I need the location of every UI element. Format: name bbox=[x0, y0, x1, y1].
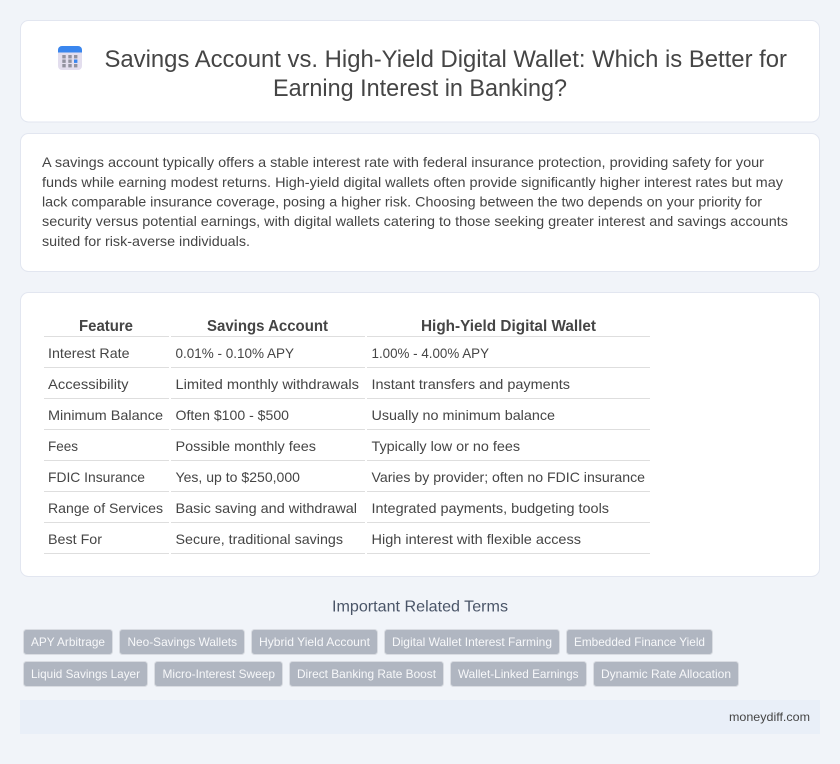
tags: related terms bbox=[24, 630, 738, 686]
tag: APY Arbitrage bbox=[31, 635, 105, 649]
tag bbox=[120, 630, 244, 654]
row: interest rate: 1.00% - 4.00% APY bbox=[372, 345, 490, 361]
title: Earning Interest in Banking? bbox=[273, 75, 567, 102]
row: minimum balance: Usually no minimum balance bbox=[372, 407, 555, 423]
text block: summary: funds while earning modest returns. High-yield digital wallets often provide significantly higher interest rates but may bbox=[42, 174, 783, 190]
row: accessibility bbox=[48, 376, 570, 392]
row: range of services: Range of Services bbox=[48, 500, 163, 516]
row: FDIC insurance: FDIC Insurance bbox=[48, 469, 145, 485]
table header bbox=[79, 318, 597, 335]
text block: summary bbox=[42, 154, 788, 249]
row: interest rate bbox=[48, 345, 490, 361]
row: FDIC insurance: Yes, up to $250,000 bbox=[176, 469, 300, 485]
footer bbox=[20, 700, 820, 734]
row: range of services bbox=[48, 500, 609, 516]
icon: calendar bbox=[58, 46, 82, 70]
tag: Wallet-Linked Earnings bbox=[458, 667, 578, 681]
row: minimum balance bbox=[48, 407, 555, 423]
tag bbox=[24, 630, 112, 654]
tag bbox=[384, 630, 560, 654]
row: accessibility: Limited monthly withdrawals bbox=[176, 376, 359, 392]
tag: Dynamic Rate Allocation bbox=[601, 667, 731, 681]
tag bbox=[290, 662, 444, 686]
title bbox=[104, 46, 787, 102]
row: FDIC insurance: Varies by provider; often no FDIC insurance bbox=[372, 469, 645, 485]
footer source: moneydiff.com bbox=[729, 710, 810, 724]
tag bbox=[154, 662, 282, 686]
row: best for: High interest with flexible access bbox=[372, 531, 581, 547]
row: fees: Fees bbox=[48, 438, 78, 454]
panel: comparison table bbox=[20, 292, 820, 576]
table header: Feature bbox=[79, 318, 133, 335]
row: fees: Typically low or no fees bbox=[372, 438, 520, 454]
row: best for: Best For bbox=[48, 531, 102, 547]
row: fees: Possible monthly fees bbox=[176, 438, 316, 454]
table header: Savings Account bbox=[207, 318, 329, 335]
row: minimum balance: Often $100 - $500 bbox=[176, 407, 289, 423]
tag bbox=[450, 662, 586, 686]
tag: Hybrid Yield Account bbox=[259, 635, 371, 649]
tag: Neo-Savings Wallets bbox=[128, 635, 237, 649]
table header: High-Yield Digital Wallet bbox=[421, 318, 597, 335]
row: FDIC insurance bbox=[48, 469, 645, 485]
table rules bbox=[44, 336, 650, 554]
tag: Digital Wallet Interest Farming bbox=[392, 635, 552, 649]
row: fees bbox=[48, 438, 520, 454]
row: best for bbox=[48, 531, 581, 547]
text block: summary: security versus potential earnings, with digital wallets catering to those seeking greater interest and savings accounts bbox=[42, 213, 788, 229]
row: range of services: Basic saving and withdrawal bbox=[176, 500, 357, 516]
tag: Embedded Finance Yield bbox=[574, 635, 705, 649]
row: best for: Secure, traditional savings bbox=[176, 531, 343, 547]
tag: Micro-Interest Sweep bbox=[162, 667, 275, 681]
row: accessibility: Accessibility bbox=[48, 376, 128, 392]
tag bbox=[566, 630, 712, 654]
heading: related terms: Important Related Terms bbox=[332, 598, 508, 616]
text block: summary: lack comparable insurance coverage, posing a higher risk. Choosing between the two depends on your priority for bbox=[42, 194, 762, 210]
row: interest rate: 0.01% - 0.10% APY bbox=[176, 345, 295, 361]
row: interest rate: Interest Rate bbox=[48, 345, 130, 361]
tag bbox=[24, 662, 148, 686]
text block: summary: suited for risk-averse individuals. bbox=[42, 233, 250, 249]
tag: Direct Banking Rate Boost bbox=[297, 667, 437, 681]
panel: summary paragraph bbox=[20, 134, 820, 272]
row: accessibility: Instant transfers and payments bbox=[372, 376, 570, 392]
tag bbox=[594, 662, 738, 686]
row: range of services: Integrated payments, budgeting tools bbox=[372, 500, 609, 516]
tag: Liquid Savings Layer bbox=[31, 667, 140, 681]
tag bbox=[252, 630, 378, 654]
title: Savings Account vs. High-Yield Digital Wallet: Which is Better for bbox=[104, 46, 787, 73]
row: minimum balance: Minimum Balance bbox=[48, 407, 163, 423]
text block: summary: A savings account typically offers a stable interest rate with federal insurance protection, providing safety for your bbox=[42, 154, 764, 170]
panel: header bbox=[20, 20, 820, 122]
